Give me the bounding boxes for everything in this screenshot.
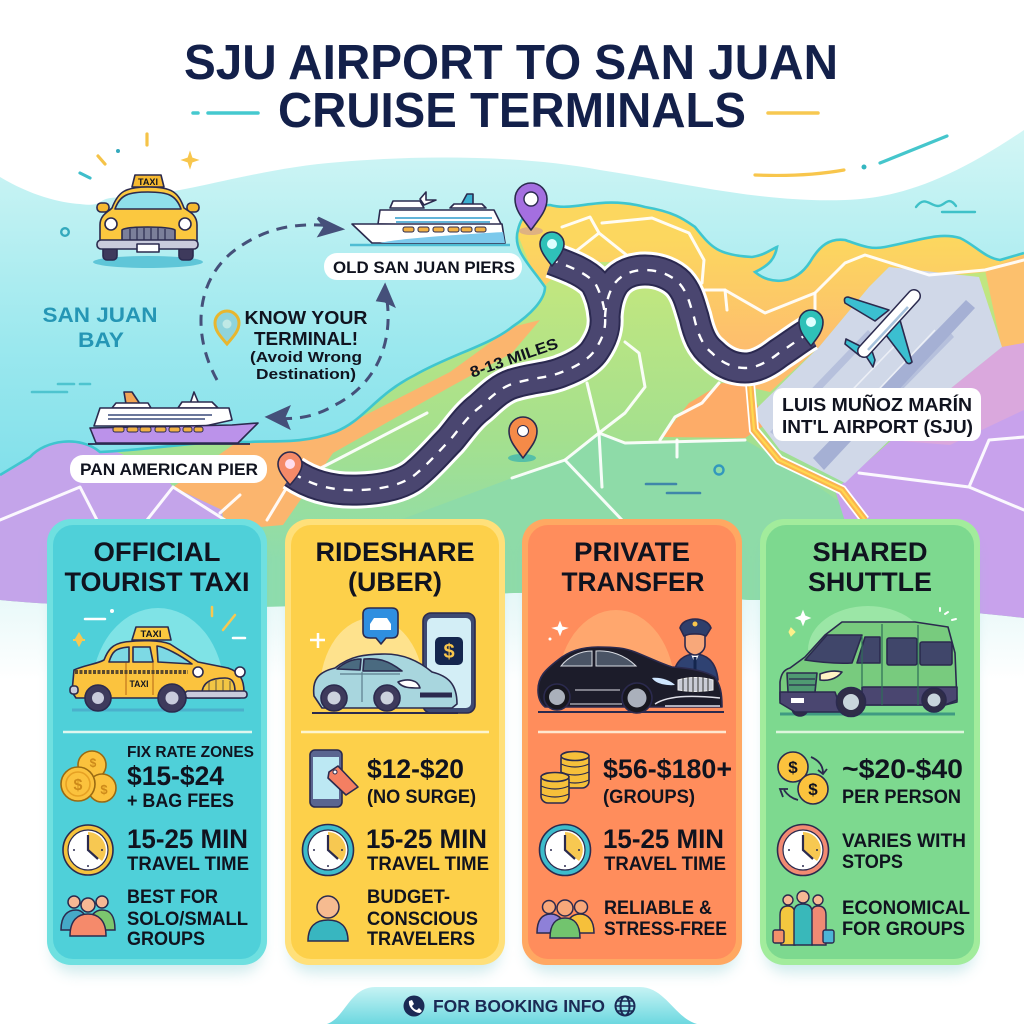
road route with dashed center line — [293, 260, 809, 490]
icon: coins: $ — [74, 777, 83, 794]
divider — [63, 731, 252, 733]
pin: airport — [799, 310, 823, 346]
callout: know your terminal: (Avoid Wrong — [250, 349, 362, 366]
title: CRUISE TERMINALS — [278, 84, 746, 138]
best for: SOLO/SMALL — [127, 909, 248, 930]
fare text: + BAG FEES — [127, 791, 234, 812]
icon: coins — [61, 751, 116, 802]
fare text — [127, 744, 254, 812]
icon: yellow pin — [215, 311, 239, 344]
coastline — [0, 203, 1024, 475]
panel: shared shuttle — [760, 519, 980, 965]
cruise ship: pan american — [88, 392, 258, 444]
illustration: car and phone — [310, 608, 475, 713]
heading: PRIVATE — [574, 537, 690, 567]
travel time: STOPS — [842, 852, 903, 873]
pin: old san juan — [515, 183, 547, 235]
best for: GROUPS — [127, 929, 205, 950]
taxi front icon — [93, 175, 203, 268]
title — [184, 36, 838, 138]
icon: phone — [404, 996, 424, 1016]
roads network — [0, 217, 1024, 520]
travel time: TRAVEL TIME — [604, 854, 726, 875]
heading — [562, 537, 704, 597]
text: san juan bay: SAN JUAN — [42, 304, 158, 327]
icon: phone with price tag — [310, 750, 358, 807]
label: airport: LUIS MUÑOZ MARÍN — [782, 394, 972, 415]
travel time: 15-25 MIN — [127, 824, 248, 854]
travel time: 15-25 MIN — [603, 824, 724, 854]
icon: clock — [63, 825, 113, 875]
label: distance: 8-13 MILES — [468, 335, 560, 381]
benefit: FOR GROUPS — [842, 919, 965, 940]
illustration: car and phone: $ — [443, 641, 455, 663]
benefit — [604, 898, 727, 940]
heading: TOURIST TAXI — [64, 567, 250, 597]
icon: coins: $ — [90, 756, 97, 770]
label: pan american pier — [70, 455, 267, 483]
travel time: 15-25 MIN — [366, 824, 487, 854]
title: SJU AIRPORT TO SAN JUAN — [184, 36, 838, 90]
icon: stacked coins — [541, 752, 589, 803]
travel time — [366, 824, 489, 875]
callout: know your terminal: TERMINAL! — [254, 329, 358, 349]
audience — [367, 887, 478, 950]
dashed circular arrows — [201, 218, 393, 427]
label: old san juan piers — [324, 253, 522, 280]
illustration: taxi side view: TAXI — [130, 679, 148, 689]
label: airport — [773, 388, 981, 441]
taxi front icon: TAXI — [138, 177, 158, 187]
icon: person — [308, 896, 348, 941]
audience: TRAVELERS — [367, 929, 475, 950]
icon: clock — [778, 824, 828, 876]
illustration: taxi side view: TAXI — [140, 629, 162, 639]
card shadows — [52, 535, 975, 973]
travel time — [603, 824, 726, 875]
travel time — [127, 824, 249, 875]
booking text: FOR BOOKING INFO — [433, 996, 605, 1016]
icon: travelers with luggage — [773, 891, 834, 945]
benefit: STRESS-FREE — [604, 919, 727, 940]
label: old san juan piers: OLD SAN JUAN PIERS — [333, 258, 515, 277]
heading: (UBER) — [348, 567, 442, 597]
benefit: RELIABLE & — [604, 898, 712, 919]
callout: know your terminal: KNOW YOUR — [244, 308, 368, 328]
fare text — [367, 754, 476, 808]
cruise ship: old san juan — [350, 192, 510, 245]
benefit — [842, 898, 970, 940]
divider — [301, 731, 489, 733]
icon: group — [61, 896, 115, 936]
decorative map marks — [32, 134, 975, 493]
fare text: ~$20-$40 — [842, 754, 963, 784]
illustration: limousine and chauffeur — [538, 610, 724, 713]
icon: group — [537, 900, 594, 938]
heading: RIDESHARE — [316, 537, 474, 567]
heading: SHARED — [812, 537, 928, 567]
panel: official tourist taxi — [47, 519, 267, 965]
best for: BEST FOR — [127, 887, 218, 908]
benefit: ECONOMICAL — [842, 898, 970, 919]
title accents — [193, 111, 818, 115]
travel time: TRAVEL TIME — [127, 854, 249, 875]
icon: exchanging coins — [778, 752, 828, 804]
label: airport: INT'L AIRPORT (SJU) — [782, 417, 973, 437]
text: san juan bay: BAY — [78, 329, 124, 352]
icon: coins: $ — [100, 782, 108, 797]
icon: exchanging coins: $ — [788, 758, 798, 777]
travel time: VARIES WITH — [842, 831, 966, 852]
panel: rideshare — [285, 519, 505, 965]
callout: know your terminal — [215, 308, 368, 383]
fare text: $12-$20 — [367, 754, 464, 784]
fare text: $56-$180+ — [603, 754, 732, 784]
fare text — [842, 754, 963, 808]
icon: exchanging coins: $ — [808, 780, 818, 799]
text: san juan bay — [42, 304, 158, 352]
illustration: shuttle van — [780, 606, 957, 716]
icon: clock — [302, 824, 354, 876]
callout: know your terminal: Destination) — [256, 366, 356, 383]
heading: SHUTTLE — [808, 567, 932, 597]
heading: OFFICIAL — [94, 537, 220, 567]
pin: route start teal — [540, 232, 564, 266]
heading — [316, 537, 474, 597]
label: pan american pier: PAN AMERICAN PIER — [80, 460, 258, 479]
footer banner — [327, 987, 697, 1024]
icon: clock — [540, 824, 590, 876]
best for — [127, 887, 248, 950]
fare text: $15-$24 — [127, 761, 224, 791]
audience: CONSCIOUS — [367, 909, 478, 930]
panel: private transfer — [522, 519, 742, 965]
heading — [808, 537, 932, 597]
travel time: TRAVEL TIME — [367, 854, 489, 875]
divider — [776, 731, 964, 733]
fare text — [603, 754, 732, 808]
heading — [64, 537, 250, 597]
fare text: FIX RATE ZONES — [127, 744, 254, 761]
fare text: (NO SURGE) — [367, 787, 476, 808]
pin: orange center — [508, 417, 537, 462]
audience: BUDGET- — [367, 887, 450, 908]
airport runways — [770, 300, 975, 470]
airplane — [844, 296, 914, 367]
travel time — [842, 831, 966, 873]
map — [0, 130, 1024, 630]
illustration: taxi side view — [70, 607, 247, 712]
pin: pan american — [278, 452, 302, 485]
heading: TRANSFER — [562, 567, 704, 597]
fare text: (GROUPS) — [603, 787, 695, 808]
fare text: PER PERSON — [842, 787, 961, 808]
divider — [538, 731, 726, 733]
icon: globe — [616, 996, 634, 1016]
land areas — [0, 204, 1024, 618]
sea: san juan bay — [0, 130, 1024, 560]
